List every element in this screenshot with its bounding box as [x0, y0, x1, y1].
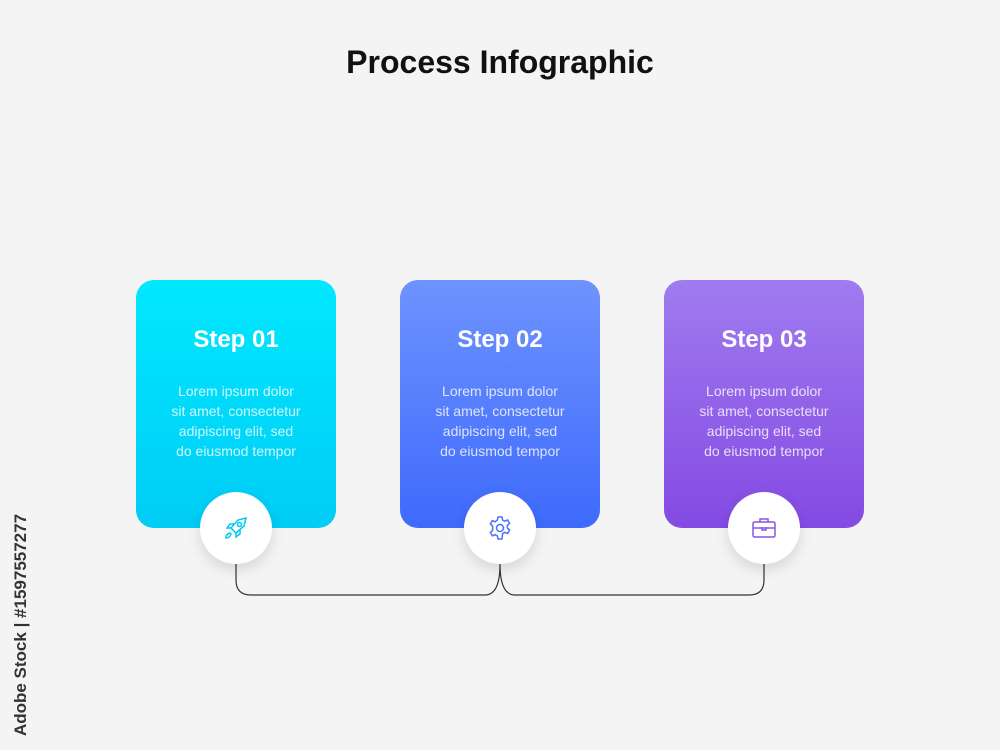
title: Process Infographic — [346, 44, 654, 80]
panel: step 01: Step 01 — [193, 326, 279, 353]
panel: step 02 — [400, 280, 600, 528]
panel: step 03: Step 03 — [721, 326, 807, 353]
panel: step 01: sit amet, consectetur — [171, 403, 301, 419]
panel: step 02: sit amet, consectetur — [435, 403, 565, 419]
icon: gear — [464, 492, 536, 564]
panel: step 02: do eiusmod tempor — [440, 443, 560, 459]
watermark id: Adobe Stock | #1597557277 — [11, 514, 30, 736]
panel: step 03: Lorem ipsum dolor — [706, 383, 822, 399]
panel: step 01: do eiusmod tempor — [176, 443, 296, 459]
panel: step 01: Lorem ipsum dolor — [178, 383, 294, 399]
panel: step 02: Step 02 — [457, 326, 543, 353]
panel: step 01: adipiscing elit, sed — [179, 423, 293, 439]
panel: step 02: adipiscing elit, sed — [443, 423, 557, 439]
icon: briefcase — [728, 492, 800, 564]
panel: step 03: do eiusmod tempor — [704, 443, 824, 459]
panel: step 02: Lorem ipsum dolor — [442, 383, 558, 399]
panel: step 03: sit amet, consectetur — [699, 403, 829, 419]
panel: step 03 — [664, 280, 864, 528]
icon: rocket — [200, 492, 272, 564]
panel: step 01 — [136, 280, 336, 528]
panel: step 03: adipiscing elit, sed — [707, 423, 821, 439]
